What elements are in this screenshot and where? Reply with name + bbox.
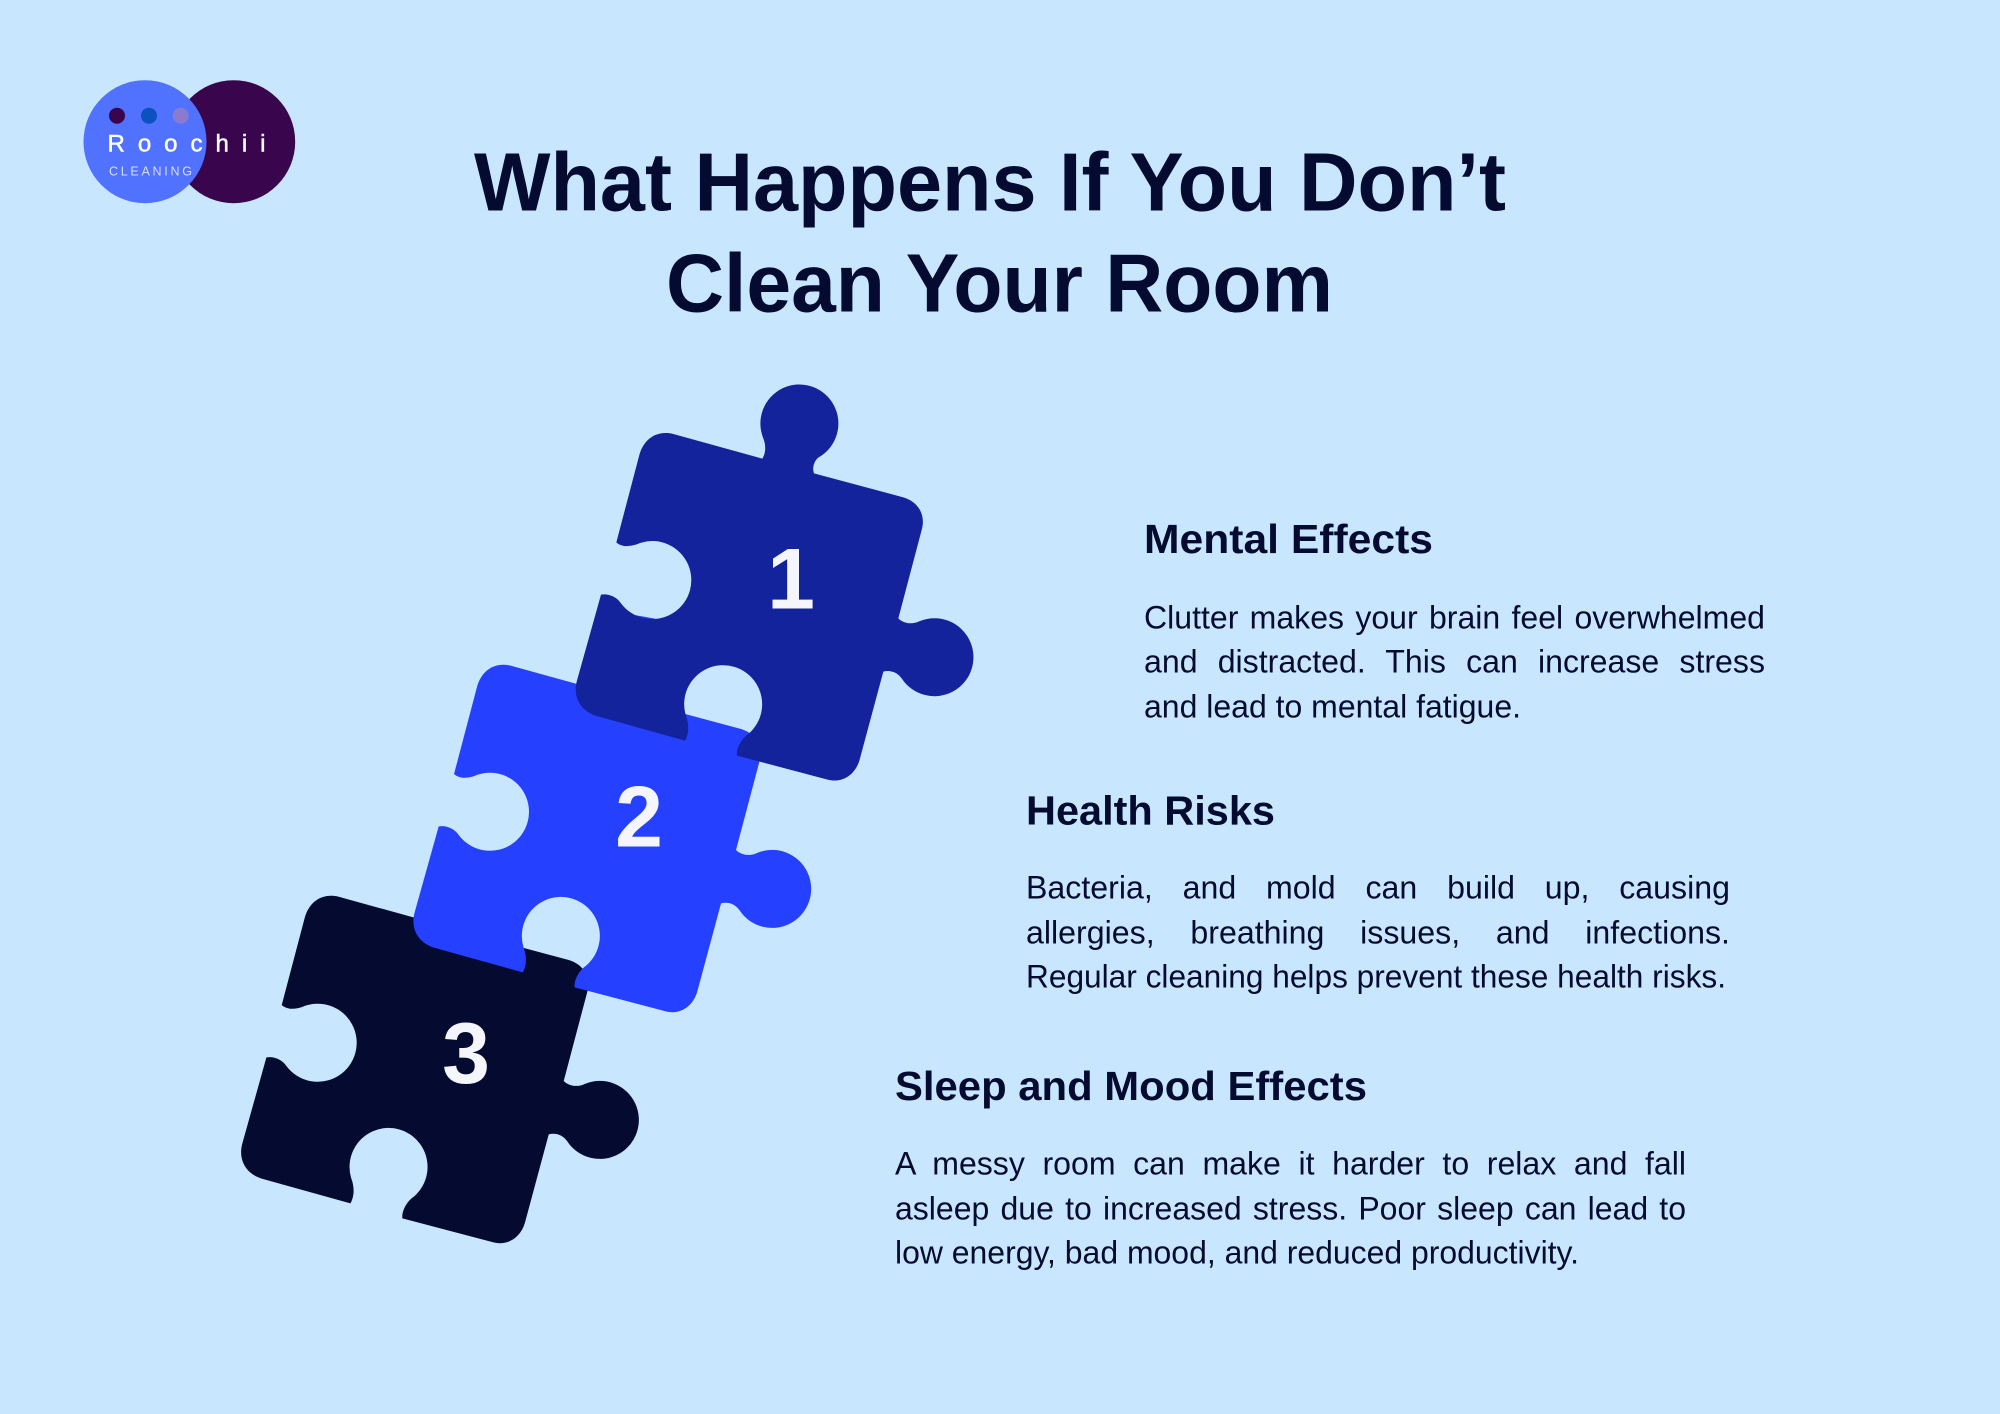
heading: Sleep and Mood Effects: Sleep and Mood Effects [895,1063,1367,1109]
panel: Health Risks [1026,787,1730,994]
title: Clean Your Room [666,237,1333,330]
puzzle piece 3 [241,847,639,1243]
heading: Mental Effects: Mental Effects [1144,516,1433,562]
body: Sleep and Mood Effects: A messy room can make it harder to relax and fall [895,1146,1686,1182]
body: Health Risks: Regular cleaning helps prevent these health risks. [1026,958,1726,994]
logo: Roochii Cleaning [84,80,295,203]
body: Health Risks: Bacteria, and mold can build up, causing [1026,869,1730,905]
body: Health Risks: allergies, breathing issues, and infections. [1026,914,1730,950]
logo dots [109,108,189,124]
body: Sleep and Mood Effects [895,1146,1686,1270]
title: What Happens If You Don’t [474,136,1506,229]
logo tagline: CLEANING [109,165,192,179]
panel: Sleep and Mood Effects [895,1063,1686,1270]
panel: Mental Effects [1144,516,1765,724]
body: Health Risks [1026,869,1730,994]
title [474,136,1506,330]
puzzle chain [241,384,973,1243]
body: Sleep and Mood Effects: low energy, bad mood, and reduced productivity. [895,1234,1579,1270]
puzzle piece 2: 2 [615,770,663,866]
body: Mental Effects [1144,599,1765,724]
puzzle piece 3: 3 [442,1006,490,1102]
body: Sleep and Mood Effects: asleep due to increased stress. Poor sleep can lead to [895,1190,1686,1226]
puzzle piece 2 [413,616,811,1012]
logo blue circle [84,80,206,203]
body: Mental Effects: and lead to mental fatigue. [1144,688,1521,724]
body: Mental Effects: and distracted. This can increase stress [1144,644,1765,680]
puzzle piece 1: 1 [767,531,815,627]
logo wordmark: Roochii [108,130,266,157]
logo purple circle [172,80,295,203]
puzzle piece 1 [576,384,973,781]
body: Mental Effects: Clutter makes your brain feel overwhelmed [1144,599,1765,635]
heading: Health Risks: Health Risks [1026,787,1275,833]
